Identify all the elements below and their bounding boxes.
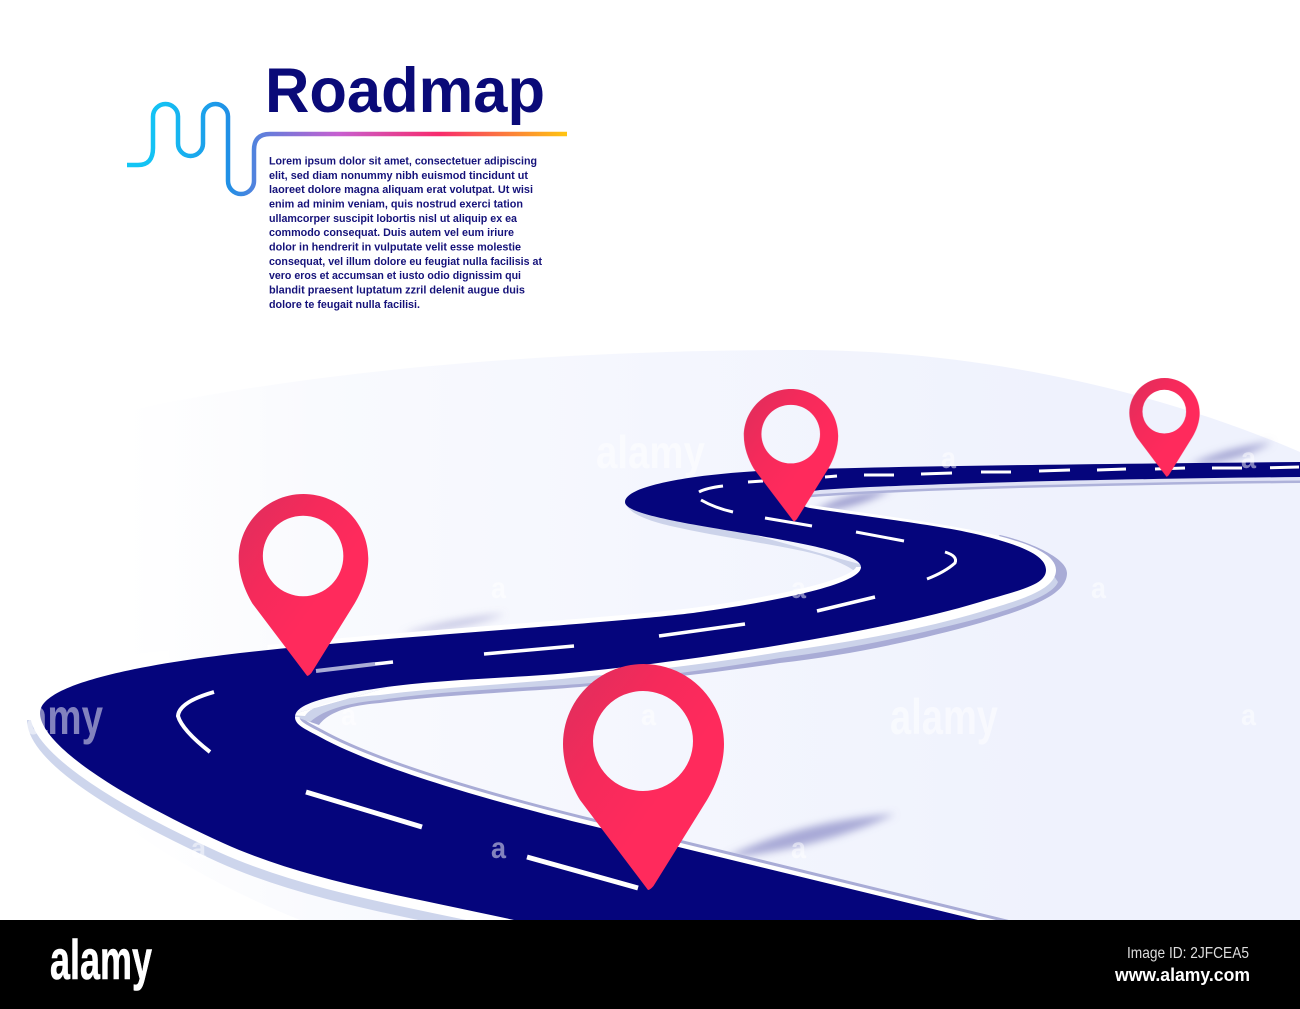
watermarks: a	[1091, 572, 1106, 605]
road edge: outer right bend, white band	[290, 505, 1056, 716]
body text: dolore te feugait nulla facilisi.	[269, 299, 420, 311]
body text: dolor in hendrerit in vulputate velit esse molestie	[269, 242, 521, 254]
watermarks: a	[1241, 699, 1256, 732]
watermarks: alamy	[890, 689, 998, 745]
image id: Image ID: 2JFCEA5	[1127, 945, 1249, 962]
watermarks: a	[341, 699, 356, 732]
road surface	[40, 462, 1300, 925]
watermarks	[0, 426, 1256, 865]
pin shadows	[402, 442, 1272, 858]
footer bar	[0, 920, 1300, 1009]
watermarks: a	[641, 699, 656, 732]
website: www.alamy.com	[1114, 965, 1250, 985]
body text: ullamcorper suscipit lobortis nisl ut aliquip ex ea	[269, 213, 518, 225]
map pin 3	[1129, 378, 1200, 477]
road edge: inner bend bottom, white band	[295, 717, 1018, 930]
watermarks: a	[491, 572, 506, 605]
watermarks: a	[791, 572, 806, 605]
body text: Lorem ipsum dolor sit amet, consectetuer adipiscing	[269, 156, 537, 168]
watermarks: a	[191, 832, 206, 865]
map pin 2	[744, 389, 838, 521]
road edge: far stretch	[800, 476, 1300, 492]
body text: vero eros et accumsan et iusto odio dignissim qui	[269, 270, 521, 282]
title: Roadmap	[265, 56, 545, 126]
body text: consequat, vel illum dolore eu feugiat nulla facilisis at	[269, 256, 542, 268]
body text: commodo consequat. Duis autem vel eum iriure	[269, 227, 514, 239]
road edge: outer right bend, light band	[290, 570, 1058, 722]
road edge: upper lobe underside	[625, 502, 870, 575]
map pin 4	[563, 664, 724, 890]
road edge: left lobe	[40, 660, 550, 937]
watermarks: a	[491, 832, 506, 865]
footer logo: alamy	[50, 928, 152, 991]
watermarks: a	[1241, 442, 1256, 475]
road	[40, 462, 1300, 937]
watermarks: a	[791, 832, 806, 865]
road edge: lower stretch highlight	[268, 567, 861, 650]
body text: enim ad minim veniam, quis nostrud exerci tation	[269, 198, 523, 210]
body text: elit, sed diam nonummy nibh euismod tincidunt ut	[269, 170, 528, 182]
body text: laoreet dolore magna aliquam erat volutpat. Ut wisi	[269, 184, 533, 196]
body text: blandit praesent luptatum zzril delenit augue duis	[269, 284, 525, 296]
road lane markings	[178, 467, 1299, 888]
watermarks: alamy	[596, 426, 705, 478]
body text	[269, 156, 542, 311]
road edge: inner bend bottom, dark line	[295, 717, 1018, 930]
map pin 1	[239, 494, 368, 676]
background terrain	[0, 350, 1300, 920]
winding gradient line	[127, 104, 567, 194]
watermarks: a	[941, 442, 956, 475]
road edge: outer right bend, dark band	[290, 535, 1067, 725]
